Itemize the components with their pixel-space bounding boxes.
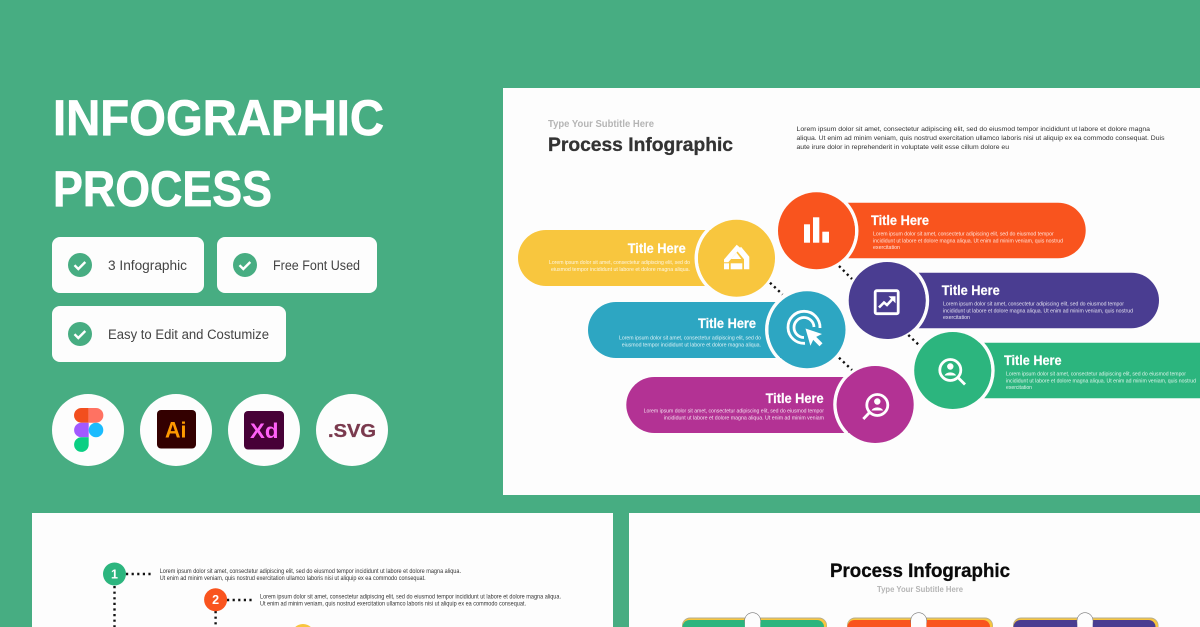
step 1 text: Ut enim ad minim veniam, quis nostrud exercitation ullamco laboris nisi ut aliquip ex ea commodo consequat. [160,576,426,582]
icon: person search [863,394,888,419]
feature chips [52,237,377,362]
step: yellow [518,220,775,297]
icon: bar chart [804,217,829,243]
heading: Process Infographic [548,134,733,156]
step 2 marker: 2 [212,593,219,607]
step: purple: incididunt ut labore et dolore magna aliqua. Ut enim ad minim veniam, quis nostrud [943,308,1133,314]
step: magenta: Title Here [766,390,824,406]
step: green: Lorem ipsum dolor sit amet, consectetur adipiscing elit, sed do eiusmod tempor [1006,371,1186,377]
step 1 text: Lorem ipsum dolor sit amet, consectetur adipiscing elit, sed do eiusmod tempor incididunt ut labore et dolore magna aliqua. [160,569,461,575]
subtitle: Type Your Subtitle Here [548,119,654,130]
step 2 text [260,594,561,608]
intro paragraph [796,127,1164,151]
panel: main process infographic [503,88,1200,495]
dashed connectors [114,574,254,627]
step: green: Title Here [1004,352,1062,368]
chip: 3 infographic: 3 Infographic [108,258,187,273]
step 2 text: Lorem ipsum dolor sit amet, consectetur adipiscing elit, sed do eiusmod tempor incididunt ut labore et dolore magna aliqua. [260,594,561,600]
intro paragraph: aute irure dolor in reprehenderit in voluptate velit esse cillum dolore eu [796,145,1009,151]
chip: easy to edit: Easy to Edit and Costumize [108,327,269,342]
icon: person search [940,360,965,384]
icon: xd [228,394,300,466]
icon: figma [52,394,124,466]
step 3 marker [292,624,314,627]
heading: Process Infographic [830,560,1010,582]
chip: free font used [217,237,377,293]
step: yellow: Title Here [628,240,686,256]
chip: free font used: Free Font Used [273,258,360,273]
step: magenta: Lorem ipsum dolor sit amet, consectetur adipiscing elit, sed do eiusmod tempor [644,408,824,414]
step: teal: Lorem ipsum dolor sit amet, consectetur adipiscing elit, sed do [619,335,761,341]
subtitle: Type Your Subtitle Here [877,584,963,594]
connector dots [770,266,920,370]
step 1 text [160,569,461,582]
step: orange [778,192,1086,269]
step: green [914,332,1200,409]
card: purple [1013,613,1158,627]
step 2 marker [204,588,227,611]
step 2 text: Ut enim ad minim veniam, quis nostrud exercitation ullamco laboris nisi ut aliquip ex ea commodo consequat. [260,602,526,608]
chip: easy to edit [52,306,286,362]
step: teal [588,291,846,368]
step 1 marker: 1 [111,568,118,582]
step: magenta: incididunt ut labore et dolore magna aliqua. Ut enim ad minim veniam [664,415,824,421]
step: orange: Title Here [871,212,929,228]
step: purple: Lorem ipsum dolor sit amet, consectetur adipiscing elit, sed do eiusmod tempor [943,301,1124,307]
icon: illustrator: Ai [165,418,186,442]
intro paragraph: aliqua. Ut enim ad minim veniam, quis nostrud exercitation ullamco laboris nisi ut aliquip ex ea commodo consequat. Duis [796,136,1164,142]
tool icons [52,394,388,466]
icon: target cursor [788,311,822,346]
icon: svg [316,394,388,466]
step: orange: exercitation [873,245,900,251]
step: purple: exercitation [943,315,970,321]
title: INFOGRAPHIC [53,90,384,146]
step: purple [849,262,1159,339]
intro paragraph: Lorem ipsum dolor sit amet, consectetur adipiscing elit, sed do eiusmod tempor incididunt ut labore et dolore magna [796,127,1151,133]
icon: trend frame [875,291,898,314]
title [53,90,384,217]
icon: xd: Xd [250,419,278,443]
icon: illustrator [140,394,212,466]
step 1 marker [103,562,126,586]
card: green [682,613,827,627]
title: PROCESS [53,161,272,217]
step: yellow: Lorem ipsum dolor sit amet, consectetur adipiscing elit, sed do [549,260,690,266]
panel: numbered steps [32,513,613,627]
panel: process cards [629,513,1200,627]
card: orange [847,613,993,627]
step: teal: eiusmod tempor incididunt ut labore et dolore magna aliqua. [622,342,761,348]
step: orange: incididunt ut labore et dolore magna aliqua. Ut enim ad minim veniam, quis nostrud [873,238,1063,244]
step: teal: Title Here [698,315,756,331]
icon: svg: .SVG [328,421,376,441]
step: orange: Lorem ipsum dolor sit amet, consectetur adipiscing elit, sed do eiusmod tempor [873,231,1054,237]
icon: house [724,245,749,269]
step: purple: Title Here [942,282,1000,298]
chip: 3 infographic [52,237,204,293]
step: green: exercitation [1006,385,1032,391]
step: magenta [626,366,914,443]
step: yellow: eiusmod tempor incididunt ut labore et dolore magna aliqua. [551,267,690,273]
